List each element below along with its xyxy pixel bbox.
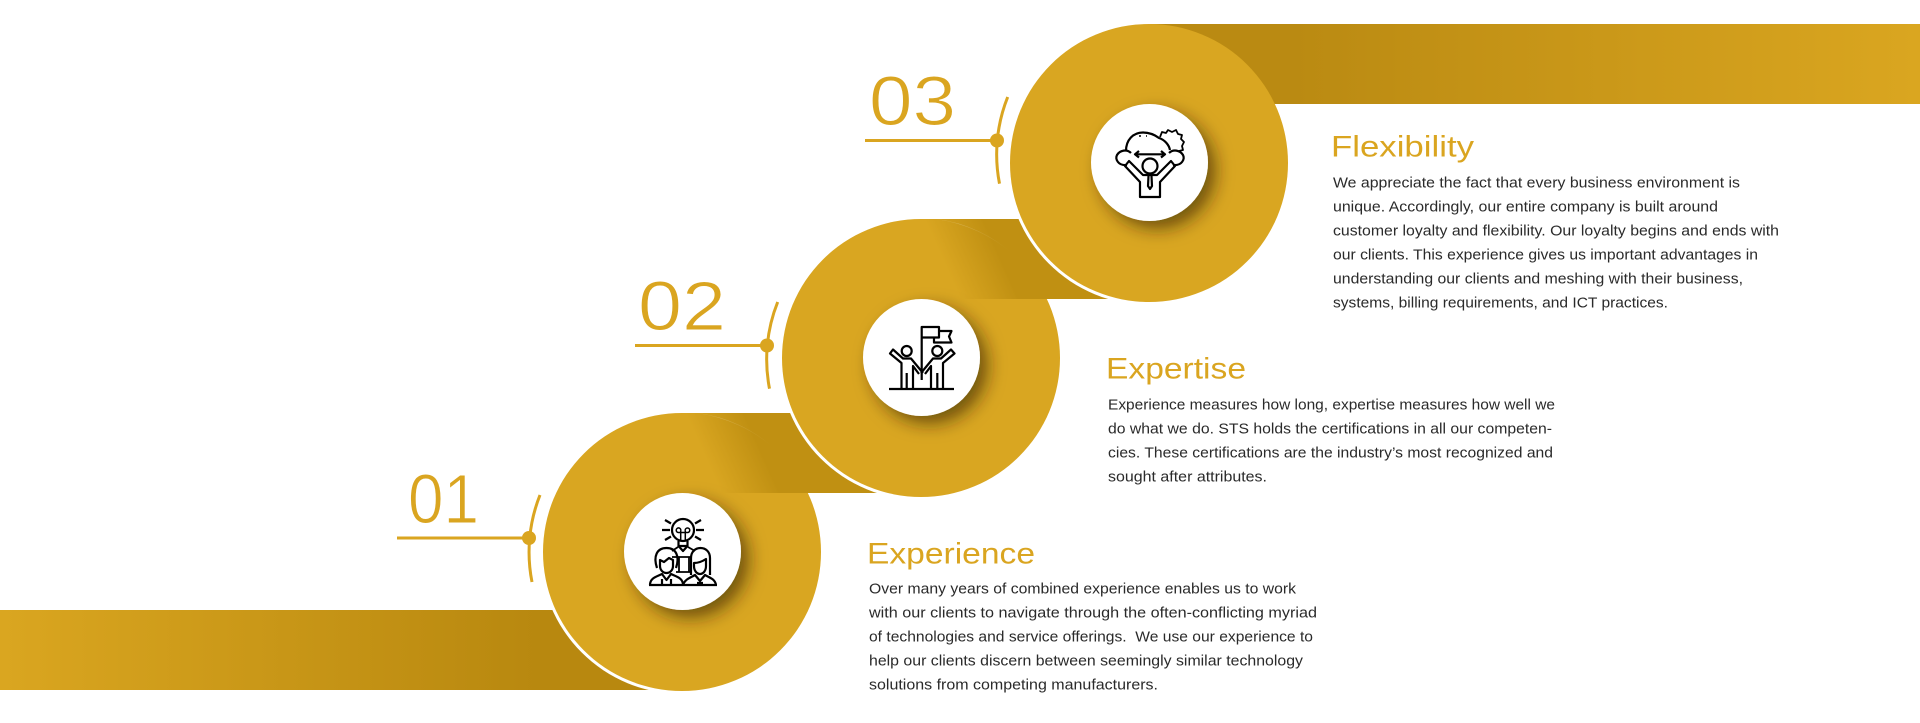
text block: Expertise: Experience measures how long, expertise measures how well we bbox=[1108, 396, 1555, 414]
white icon disc 2 bbox=[863, 299, 980, 416]
number 02 with connector bbox=[635, 267, 778, 389]
connector arc bbox=[529, 495, 540, 582]
number 03 with connector bbox=[865, 62, 1008, 184]
connector dot bbox=[760, 338, 774, 352]
connector arc bbox=[767, 302, 778, 389]
text block: Flexibility: We appreciate the fact that every business environment is bbox=[1333, 174, 1740, 192]
text block: Flexibility: unique. Accordingly, our entire company is built around bbox=[1333, 198, 1718, 216]
connector dot bbox=[522, 531, 536, 545]
label 03: 03 bbox=[869, 62, 956, 140]
number 01 with connector bbox=[397, 460, 540, 582]
text block: Experience: help our clients discern between seemingly similar technology bbox=[869, 652, 1304, 670]
bottom-left band bbox=[0, 610, 682, 690]
gold circle 1 bbox=[543, 413, 821, 691]
heading: Flexibility: Flexibility bbox=[1331, 130, 1474, 164]
heading: Expertise: Expertise bbox=[1106, 352, 1246, 386]
text block: Experience: with our clients to navigate through the often-conflicting myriad bbox=[868, 604, 1317, 622]
white edge of circle 3 bbox=[1018, 219, 1120, 299]
text block: Expertise bbox=[1108, 396, 1555, 486]
text block: Expertise: do what we do. STS holds the certifications in all our competen- bbox=[1108, 420, 1552, 438]
white edge of circle 2 bbox=[790, 413, 888, 493]
text block: Flexibility: understanding our clients and meshing with their business, bbox=[1333, 270, 1743, 288]
connector dot bbox=[990, 134, 1004, 148]
connector line bbox=[635, 344, 767, 347]
text block: Flexibility: customer loyalty and flexibility. Our loyalty begins and ends with bbox=[1333, 222, 1779, 240]
text block: Experience bbox=[868, 580, 1317, 694]
gold circle 2 bbox=[782, 219, 1060, 497]
connecting band 2 to 3 bbox=[921, 219, 1149, 299]
text block: Experience: solutions from competing manufacturers. bbox=[869, 676, 1158, 694]
heading: Experience: Experience bbox=[867, 538, 1035, 570]
icon: two people with flags bbox=[889, 327, 954, 389]
highlight on band 1 to 2 bbox=[697, 413, 775, 449]
white icon disc 1 bbox=[624, 493, 741, 610]
top-right band bbox=[1149, 24, 1920, 104]
highlight on band 2 to 3 bbox=[936, 219, 1014, 255]
connector arc bbox=[997, 97, 1008, 184]
text block: Expertise: sought after attributes. bbox=[1108, 468, 1267, 486]
text block: Flexibility: our clients. This experience gives us important advantages in bbox=[1333, 246, 1758, 264]
white edge of circle 1 bbox=[552, 610, 666, 690]
connector line bbox=[397, 536, 529, 540]
connector line bbox=[865, 139, 997, 142]
gold circle 3 bbox=[1010, 24, 1288, 302]
icon: idea bulb with two people bbox=[649, 519, 717, 585]
label 02: 02 bbox=[638, 267, 726, 345]
text block: Experience: Over many years of combined experience enables us to work bbox=[869, 580, 1297, 598]
text block: Expertise: cies. These certifications are the industry’s most recognized and bbox=[1108, 444, 1553, 462]
white icon disc 3 bbox=[1091, 104, 1208, 221]
text block: Flexibility: systems, billing requirements, and ICT practices. bbox=[1333, 294, 1668, 312]
icon: person holding up cloud with gear bbox=[1116, 130, 1184, 197]
label 01: 01 bbox=[408, 460, 479, 538]
connecting band 1 to 2 bbox=[682, 413, 921, 493]
text block: Flexibility bbox=[1333, 174, 1779, 312]
text block: Experience: of technologies and service offerings. We use our experience to bbox=[869, 628, 1313, 646]
